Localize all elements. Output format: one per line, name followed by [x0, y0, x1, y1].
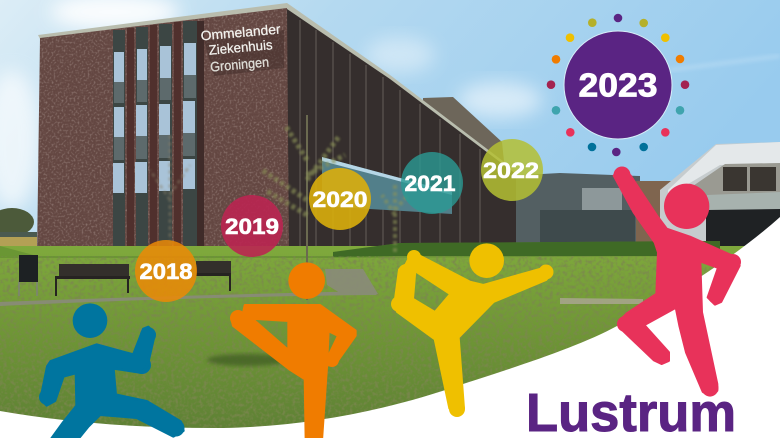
year badge 2023 with dot ring: 2023 [578, 66, 658, 104]
tree near 2020 [262, 115, 345, 300]
distant trees left [0, 208, 37, 247]
lawn [0, 241, 780, 438]
year bubble 2020 [309, 168, 371, 230]
white curved band [0, 217, 780, 438]
figure: blue runner [39, 303, 184, 438]
sign: Ommelander Ziekenhuis Groningen: Ziekenhuis [208, 37, 273, 58]
hospital front facade [37, 8, 289, 256]
year bubble 2019: 2019 [225, 214, 279, 239]
year bubble 2022: 2022 [483, 158, 539, 183]
white building right [660, 142, 780, 250]
dot ring [547, 14, 689, 156]
year bubble 2018 [135, 240, 197, 302]
hospital roof edge [38, 3, 516, 174]
bench left [55, 264, 130, 296]
bench right [196, 261, 231, 291]
sign: Ommelander Ziekenhuis Groningen: Ommelander [200, 22, 282, 43]
year bubble 2021: 2021 [404, 171, 456, 196]
year bubble 2019 [221, 195, 283, 257]
tree in front of facade [150, 135, 190, 256]
wood building [636, 181, 672, 243]
figure: orange standing pose [230, 262, 356, 438]
window columns [113, 21, 197, 256]
sapling right of 2020 [382, 185, 408, 252]
sign: Ommelander Ziekenhuis Groningen: Groningen [210, 54, 270, 75]
year bubble 2018: 2018 [140, 259, 192, 284]
year bubble 2022 [481, 139, 543, 201]
waste bin [19, 255, 38, 296]
year bubble 2020: 2020 [312, 187, 368, 212]
figure: yellow dancer [391, 243, 554, 417]
hospital side wing [287, 6, 516, 258]
central glass building [505, 173, 640, 244]
year bubble 2021 [401, 152, 463, 214]
sky [0, 0, 780, 260]
year badge 2023 with dot ring [547, 14, 689, 156]
footpath [0, 269, 378, 306]
back building [423, 97, 508, 200]
figure: red jumping pose [614, 166, 741, 396]
sign: Ommelander Ziekenhuis Groningen [200, 22, 282, 75]
